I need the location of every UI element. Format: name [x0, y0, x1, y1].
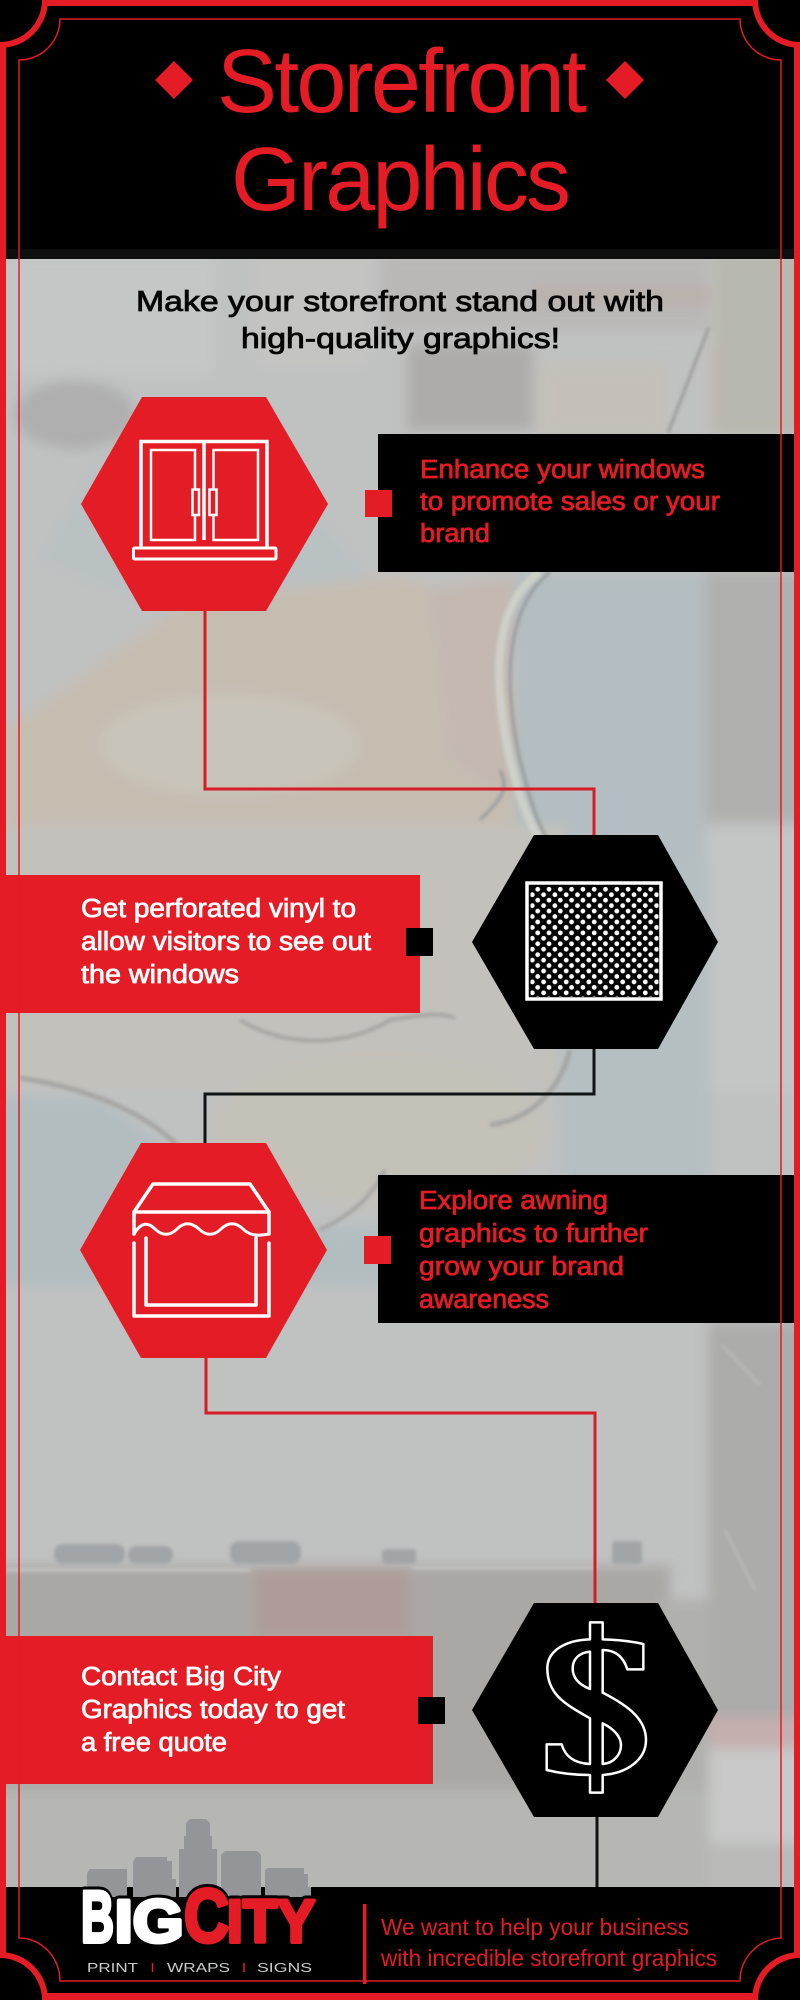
icon: right diamond [606, 61, 644, 99]
panel: step 2 perforated vinyl [0, 835, 718, 1049]
logo wordmark: B [81, 1877, 114, 1958]
logo wordmark: ITY [227, 1888, 315, 1955]
marker square: step 2 [406, 928, 433, 956]
hexagon: step 3 [80, 1143, 327, 1358]
text: step 3: graphics to further [419, 1220, 649, 1248]
text: step 2 [81, 895, 371, 989]
text box: step 2 [0, 875, 420, 1013]
text: step 2: the windows [81, 961, 239, 989]
text box: step 4 [0, 1636, 433, 1784]
dark band at the bottom of the header [6, 249, 794, 259]
logo wordmark: IG [115, 1888, 184, 1955]
logo wordmark: C [184, 1874, 229, 1958]
text: step 1: Enhance your windows [420, 456, 705, 484]
marker square: step 3 [364, 1236, 391, 1264]
text: step 3: grow your brand [419, 1253, 624, 1281]
icon: dollar symbol [547, 1622, 646, 1793]
icon: left diamond [155, 61, 193, 99]
logo wordmark: IG [115, 1888, 184, 1955]
footer message: We want to help your business [381, 1914, 689, 1940]
text box: step 3 [378, 1175, 794, 1323]
subtitle [136, 286, 664, 355]
logo tagline: PRINT [87, 1961, 138, 1975]
logo skyline [87, 1819, 311, 1897]
text: step 1: brand [420, 520, 490, 548]
text: step 4: a free quote [81, 1729, 227, 1757]
hexagon: step 2 [472, 835, 718, 1049]
hexagon: step 4 [472, 1603, 718, 1817]
text box: step 1 [378, 434, 794, 572]
logo wordmark: B [81, 1877, 114, 1958]
footer black panel [6, 1887, 794, 2000]
text: step 3 [419, 1187, 649, 1314]
text: step 2: Get perforated vinyl to [81, 895, 356, 923]
subtitle: high-quality graphics! [241, 323, 560, 355]
footer message [380, 1914, 717, 1971]
logo wordmark [81, 1874, 315, 1958]
hexagon: step 1 [81, 397, 328, 611]
text: step 2: allow visitors to see out [81, 928, 371, 956]
panel: step 4 contact [0, 1603, 718, 1817]
connector: step 2 to step 3 [205, 1049, 594, 1143]
logo tagline: WRAPS [167, 1961, 230, 1975]
footer message: with incredible storefront graphics [380, 1945, 717, 1971]
connector: step 3 to step 4 [206, 1358, 595, 1603]
title: Storefront [217, 32, 587, 132]
text: step 1: to promote sales or your [420, 488, 721, 516]
icon: window [134, 441, 276, 559]
title [217, 32, 587, 230]
connector: step 4 to footer [596, 1817, 598, 1888]
marker square: step 4 [418, 1697, 445, 1724]
panel: step 1 windows [81, 397, 794, 611]
icon: awning [134, 1184, 269, 1316]
logo: Big City [81, 1819, 315, 1975]
subtitle: Make your storefront stand out with [136, 286, 664, 318]
footer divider [363, 1904, 366, 1984]
logo tagline [87, 1961, 312, 1975]
text: step 3: awareness [419, 1286, 549, 1314]
logo tagline: SIGNS [257, 1961, 312, 1975]
title: Graphics [231, 130, 571, 230]
connector: step 1 to step 2 [205, 611, 594, 835]
text: step 4 [81, 1663, 345, 1757]
marker square: step 1 [365, 490, 392, 517]
text: step 4: Graphics today to get [81, 1696, 345, 1724]
logo wordmark: ITY [227, 1888, 315, 1955]
icon: perforated vinyl [527, 883, 661, 999]
text: step 1 [420, 456, 721, 548]
logo wordmark: C [184, 1874, 229, 1958]
text: step 3: Explore awning [419, 1187, 608, 1215]
panel: step 3 awning [80, 1143, 794, 1358]
header black panel [0, 0, 800, 259]
text: step 4: Contact Big City [81, 1663, 281, 1691]
